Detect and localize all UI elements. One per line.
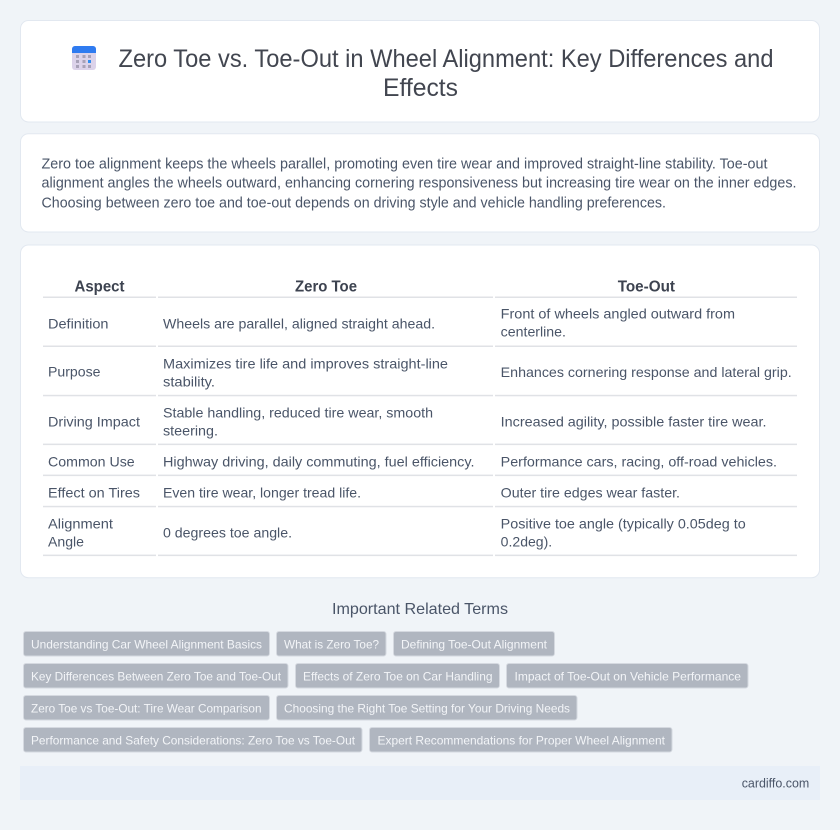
- icon: calendar: [72, 46, 96, 70]
- table row: driving impact: steering.: [163, 422, 218, 438]
- table row: purpose: Purpose: [48, 364, 101, 380]
- tag list: related terms: Choosing the Right Toe Setting for Your Driving Needs: [284, 701, 570, 715]
- table row: alignment angle: 0.2deg).: [501, 534, 552, 550]
- table row: definition: centerline.: [501, 324, 566, 340]
- footer: cardiffo.com: [742, 775, 809, 790]
- table row: common use: [48, 454, 777, 470]
- tag list: related terms: Impact of Toe-Out on Vehicle Performance: [514, 669, 741, 683]
- tag list: related terms: What is Zero Toe?: [284, 637, 379, 651]
- table row: alignment angle: 0 degrees toe angle.: [163, 524, 292, 540]
- table header row: Toe-Out: [618, 279, 676, 296]
- table row: common use: Common Use: [48, 454, 135, 470]
- heading: title: Effects: [383, 74, 458, 102]
- panel: comparison table: [20, 245, 820, 578]
- table row: alignment angle: Positive toe angle (typically 0.05deg to: [501, 516, 746, 532]
- heading: title: Zero Toe vs. Toe-Out in Wheel Alignment: Key Differences and: [118, 45, 774, 73]
- panel: summary text: [20, 134, 820, 232]
- text block: summary paragraph: Choosing between zero toe and toe-out depends on driving style and vehicle handling preferences.: [42, 195, 666, 211]
- text block: summary paragraph: alignment angles the wheels outward, enhancing cornering responsiveness but increasing tire wear on the inner edges.: [42, 176, 796, 192]
- table row: purpose: stability.: [163, 373, 215, 389]
- panel: title header: [20, 20, 820, 122]
- heading: important related terms: Important Related Terms: [332, 601, 508, 618]
- tag list: related terms: Defining Toe-Out Alignment: [401, 637, 548, 651]
- tag list: related terms: Performance and Safety Considerations: Zero Toe vs Toe-Out: [31, 733, 356, 747]
- table row: common use: Highway driving, daily commuting, fuel efficiency.: [163, 454, 474, 470]
- table header row: [74, 279, 676, 296]
- table row: alignment angle: Alignment: [48, 516, 113, 532]
- tag list: related terms: Understanding Car Wheel Alignment Basics: [31, 637, 262, 651]
- text block: summary paragraph: Zero toe alignment keeps the wheels parallel, promoting even tire wear and improved straight-line stability. Toe-out: [42, 156, 768, 172]
- table row: definition: Front of wheels angled outward from: [501, 306, 735, 322]
- table row: driving impact: Driving Impact: [48, 414, 140, 430]
- table row: purpose: Enhances cornering response and lateral grip.: [501, 364, 792, 380]
- tag list: related terms: Key Differences Between Zero Toe and Toe-Out: [31, 669, 282, 683]
- table row: effect on tires: Effect on Tires: [48, 484, 140, 500]
- table row: effect on tires: Outer tire edges wear faster.: [501, 484, 680, 500]
- table row: driving impact: [48, 404, 766, 438]
- tag list: related terms: [24, 632, 748, 752]
- text block: summary paragraph: [42, 156, 796, 211]
- table row: alignment angle: Angle: [48, 534, 84, 550]
- tag list: related terms: Zero Toe vs Toe-Out: Tire Wear Comparison: [31, 701, 262, 715]
- table row: effect on tires: [48, 484, 680, 500]
- table header row: Aspect: [74, 279, 125, 296]
- table row: driving impact: Stable handling, reduced tire wear, smooth: [163, 404, 433, 420]
- table row: purpose: Maximizes tire life and improves straight-line: [163, 355, 448, 371]
- table row: driving impact: Increased agility, possible faster tire wear.: [501, 414, 766, 430]
- table row: purpose: [48, 355, 792, 389]
- table row: definition: Definition: [48, 315, 108, 331]
- table row: common use: Performance cars, racing, off-road vehicles.: [501, 454, 777, 470]
- tag list: related terms: Expert Recommendations for Proper Wheel Alignment: [378, 733, 666, 747]
- footer: [20, 766, 820, 800]
- table row: effect on tires: Even tire wear, longer tread life.: [163, 484, 361, 500]
- table row: definition: [48, 306, 735, 340]
- heading: title: [118, 45, 774, 102]
- table header row: Zero Toe: [295, 279, 357, 296]
- tag list: related terms: Effects of Zero Toe on Car Handling: [303, 669, 492, 683]
- table row: definition: Wheels are parallel, aligned straight ahead.: [163, 315, 435, 331]
- table row: alignment angle: [48, 516, 746, 550]
